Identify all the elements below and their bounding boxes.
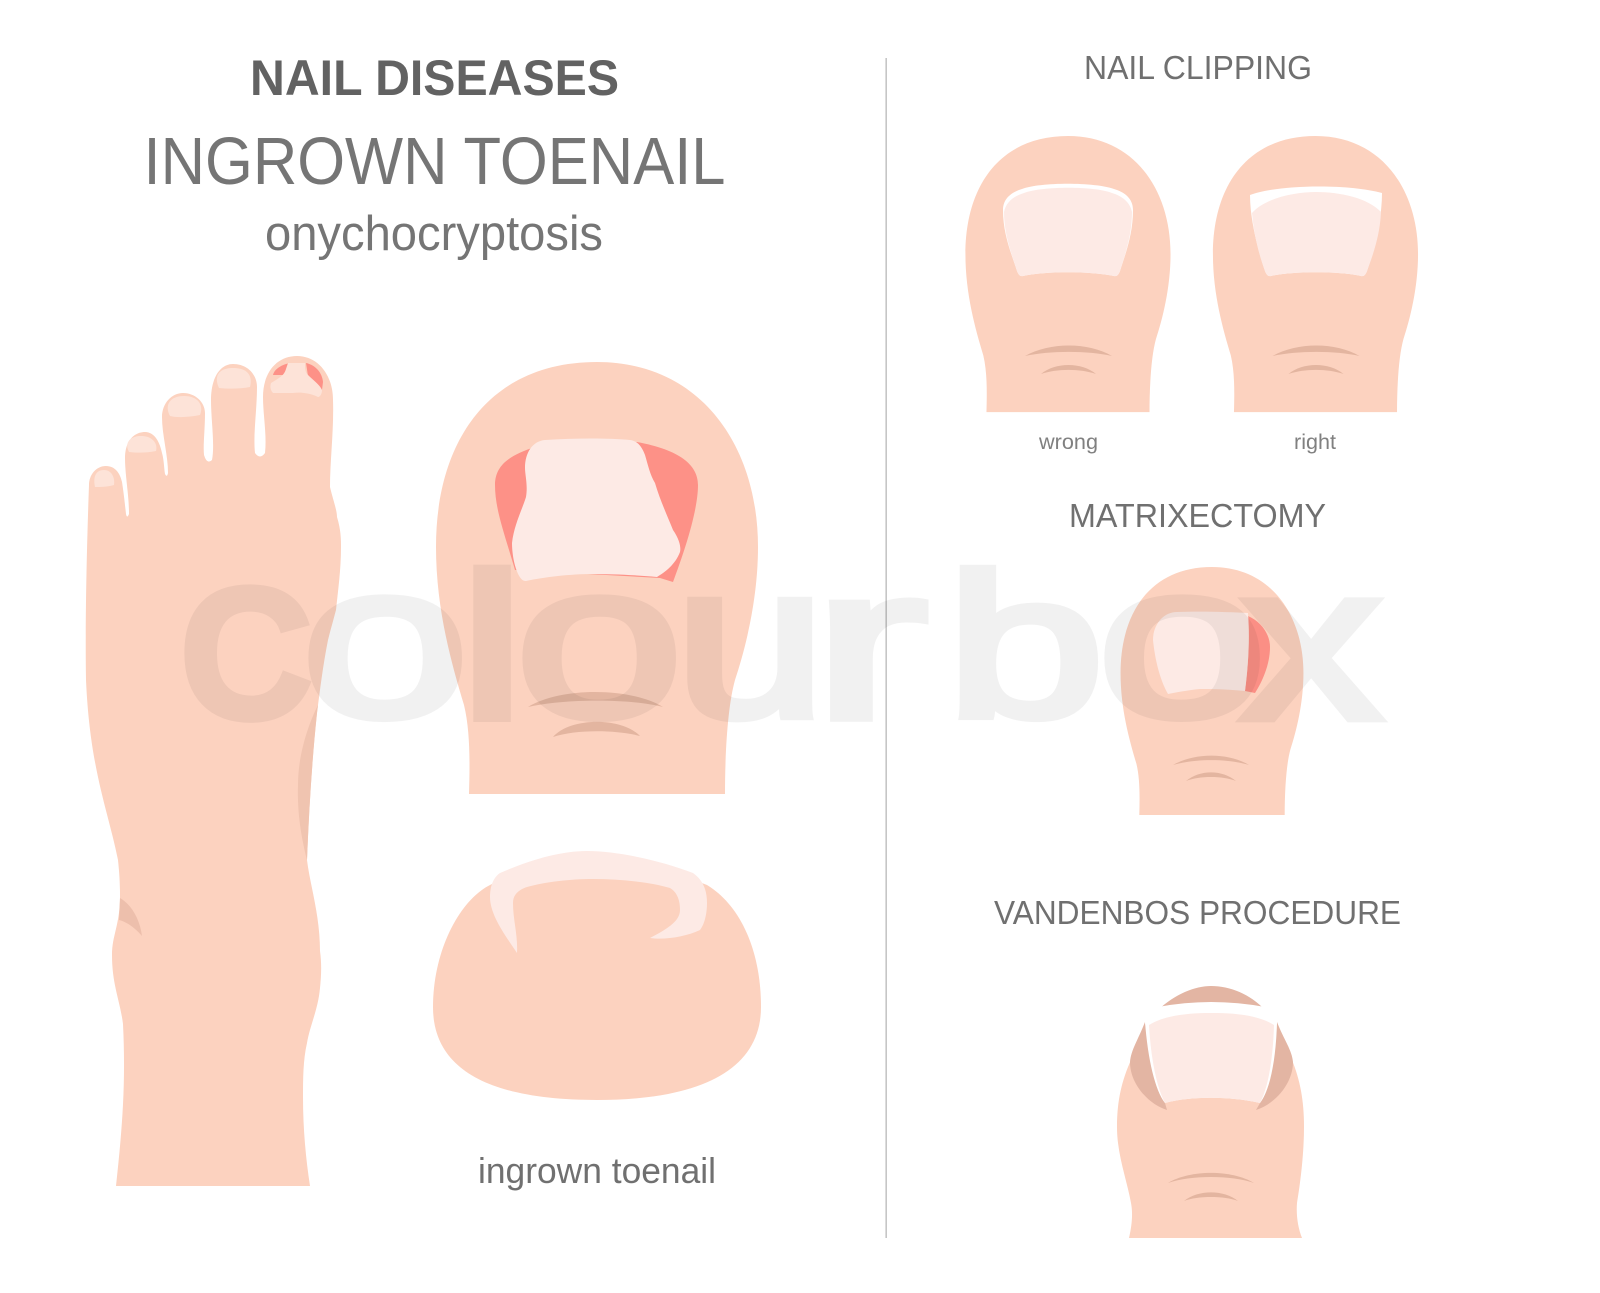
watermark: C (180, 550, 313, 758)
excised left side (1130, 1022, 1167, 1110)
illustration: foot (86, 356, 341, 1186)
watermark: o (516, 518, 683, 762)
heading: ingrown toenail: INGROWN TOENAIL (144, 124, 726, 199)
watermark: o (302, 518, 469, 762)
toe (1117, 1025, 1304, 1238)
nail rim (1250, 186, 1382, 276)
fourth toe nail (127, 436, 156, 453)
nail (1252, 192, 1381, 276)
heading: vandenbos procedure: VANDENBOS PROCEDURE (994, 894, 1401, 931)
caption: ingrown toenail: ingrown toenail (478, 1150, 716, 1191)
illustration: matrixectomy toe (1121, 567, 1303, 815)
nail (1004, 188, 1132, 276)
foot silhouette (86, 356, 341, 1186)
label: right: right (1294, 431, 1336, 454)
crease lower (1288, 365, 1344, 374)
second toe nail (217, 368, 251, 389)
removed nail edge, red (1245, 616, 1270, 693)
crease upper (1272, 346, 1360, 356)
title: nail diseases: NAIL DISEASES (250, 50, 619, 106)
divider (886, 58, 887, 1238)
crease upper (1173, 756, 1249, 765)
watermark: u (675, 519, 825, 762)
excised top (1158, 986, 1265, 1010)
watermark: r (812, 521, 928, 764)
nail (1153, 612, 1249, 694)
illustration: wrong clipping (965, 136, 1171, 412)
watermark (180, 518, 1381, 765)
illustration: ingrown toenail front view (436, 362, 758, 794)
subtitle: onychocryptosis: onychocryptosis (265, 207, 603, 261)
heading: nail clipping: NAIL CLIPPING (1084, 49, 1312, 86)
label: wrong: wrong (1038, 431, 1098, 454)
knuckle crease upper (528, 692, 663, 707)
crease lower (1041, 365, 1096, 374)
watermark: l (459, 532, 525, 762)
crease upper (1168, 1173, 1254, 1183)
inflamed nail fold (495, 442, 698, 582)
foot side shading (298, 705, 318, 860)
toe tip (433, 870, 761, 1100)
toe (965, 136, 1171, 412)
illustration: vandenbos toe (1117, 986, 1304, 1238)
toe (436, 362, 758, 794)
third toe nail (168, 396, 201, 417)
ankle crease (119, 898, 142, 936)
watermark: o (1097, 519, 1267, 763)
crease lower (1184, 1192, 1238, 1201)
knuckle crease lower (553, 722, 640, 737)
crease upper (1025, 346, 1112, 356)
nail rim (1145, 1002, 1277, 1103)
deformed nail (512, 438, 680, 581)
big toe nail, right ingrown red (306, 363, 323, 390)
excised right side (1256, 1022, 1293, 1110)
toe (1213, 136, 1418, 412)
watermark: b (946, 533, 1104, 760)
nail (1149, 1013, 1274, 1103)
big toe nail, left ingrown red (273, 363, 290, 375)
watermark: x (1242, 520, 1381, 765)
crease lower (1186, 772, 1236, 781)
illustration: right clipping (1213, 136, 1418, 412)
heading: matrixectomy: MATRIXECTOMY (1069, 497, 1326, 534)
nail rim (1003, 184, 1133, 276)
toe (1121, 567, 1303, 815)
big toe nail (270, 363, 322, 397)
little toe nail (94, 470, 114, 487)
illustration: toenail end view (433, 851, 761, 1100)
curved nail (490, 851, 707, 953)
